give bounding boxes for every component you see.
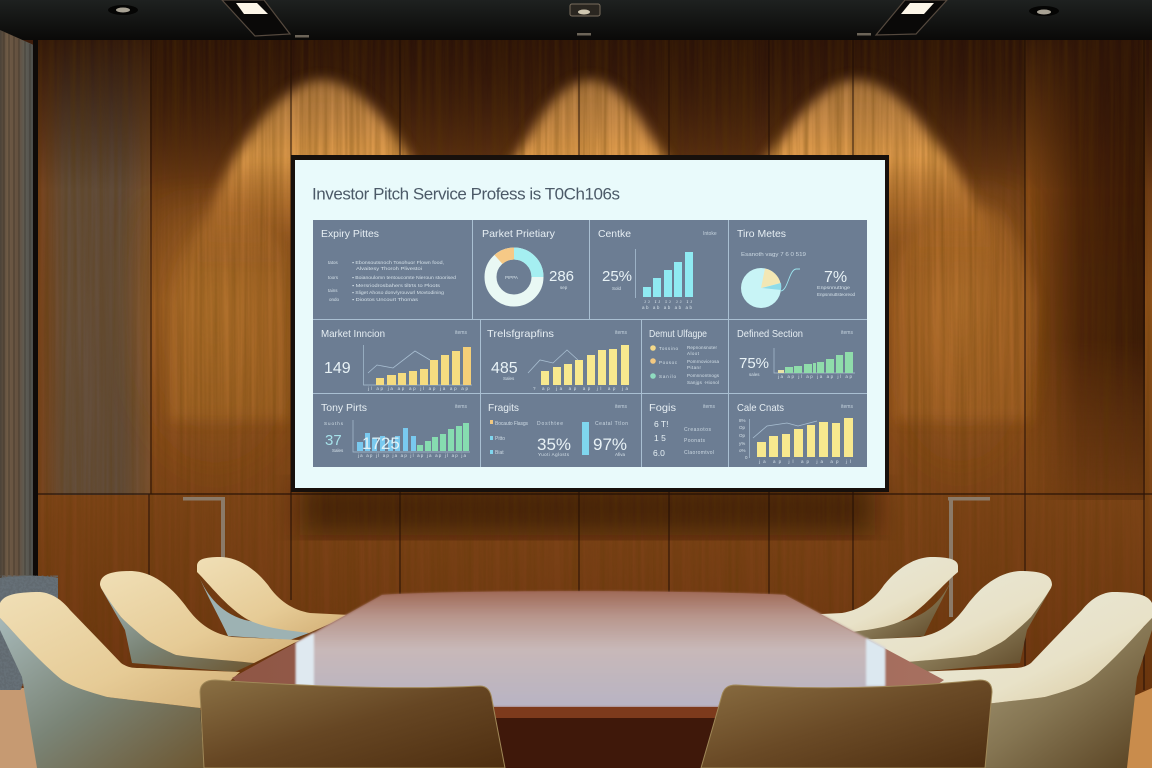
panel: cale cnats: Cale Cnats (737, 402, 784, 414)
panel: fragits: Dosthtee (537, 421, 563, 427)
panel: market inncion: Market Inncion (321, 328, 385, 340)
panel: market inncion: items (455, 330, 467, 336)
panel: trelsfgrapfins: 485 (491, 360, 518, 377)
panel: defined section: Defined Section (737, 328, 803, 340)
panel: defined section: sales (749, 372, 760, 377)
bar chart: jl ap ja ap ap jl ap ja ap ap (367, 386, 468, 391)
under table dark wood (470, 716, 730, 768)
front chair left (200, 680, 505, 768)
pie chart (741, 268, 800, 308)
panel: fogis: Creasotos (684, 427, 712, 433)
panel: demut ulfagpe: Repnonsnoter (687, 345, 718, 350)
chair right middle (852, 571, 1052, 672)
panel: expiry pittes: tatos (328, 260, 339, 265)
panel: defined section: items (841, 330, 853, 336)
panel: fogis: items (703, 404, 715, 410)
donut chart: PIPPA (505, 275, 518, 280)
panel: fragits: 35% (537, 435, 571, 454)
panel: fragits: Pitto (495, 436, 505, 442)
panel: demut ulfagpe: Demut Ulfagpe (649, 328, 707, 340)
panel: cale cnats (737, 402, 853, 464)
panel: fogis: Claoromtvol (684, 450, 714, 456)
panel: fragits: Biat (495, 450, 504, 456)
door handle right (948, 497, 990, 617)
panel: market inncion (321, 328, 472, 391)
panel: fragits: Yuoti Aglosts (538, 452, 570, 457)
panel: expiry pittes: tains (328, 288, 338, 293)
panel: cale cnats: y% (739, 441, 745, 446)
panel: parket prietiary: 286 (549, 268, 574, 285)
panel: tiro metes: Enpsnnuttnge (817, 285, 851, 290)
panel: defined section (737, 328, 855, 379)
panel: fogis (649, 402, 715, 458)
bar chart: 1725 (362, 434, 400, 453)
panel: demut ulfagpe: Aloot (687, 351, 700, 356)
panel: fogis: Fogis (649, 402, 676, 414)
chairs: left side row (0, 557, 350, 768)
panel: expiry pittes: ▪ Ebonsoutsnoch Tosohuor Flown food, (352, 260, 444, 265)
floor (0, 688, 1152, 768)
panel: tiro metes: Enpsnnuttsteoreod (817, 292, 855, 297)
panel: fragits (488, 402, 628, 457)
panel: demut ulfagpe: Pomnnontnogs (687, 373, 720, 378)
panel: trelsfgrapfins: items (615, 330, 627, 336)
panel: fogis: Poonats (684, 438, 706, 444)
panel: defined section: 75% (739, 355, 769, 372)
ceiling light right (876, 0, 947, 35)
door handle left (183, 497, 225, 559)
conference table (232, 591, 944, 718)
panel: demut ulfagpe: Tossino (659, 346, 678, 351)
panel: tony pirts: Sales (332, 448, 344, 453)
panel: demut ulfagpe: Pomrnoviorosa (687, 359, 719, 364)
panel: tiro metes: Tiro Metes (737, 228, 786, 240)
panel: tony pirts (321, 402, 470, 458)
screen title: Investor Pitch Service Profess is T0Ch106s (312, 184, 620, 204)
panel: cale cnats: Op (739, 433, 746, 438)
panel: cale cnats: 8% (739, 418, 746, 423)
ceiling light left (222, 0, 290, 36)
panel: demut ulfagpe: Pitanr (687, 365, 702, 370)
ceiling (0, 0, 1152, 40)
bar chart: ja ap jl ap ja ap jl (758, 459, 851, 464)
panel: tiro metes: 7% (824, 269, 847, 286)
panel: expiry pittes: toors (328, 275, 339, 280)
panel: cale cnats: items (841, 404, 853, 410)
bar chart: ja ap jl ap ja ap jl ap (777, 374, 852, 379)
panel: fragits: 97% (593, 435, 627, 454)
stool (0, 576, 58, 690)
chair left front (0, 592, 240, 768)
panel: fogis: 6.0 (653, 448, 665, 458)
chair left middle (100, 571, 300, 672)
panel: demut ulfagpe: Sanjgs ·Hionol (687, 380, 719, 385)
panel: tiro metes: Esanoth vagy 7 6 0 519 (741, 252, 806, 258)
panel: parket prietiary (482, 228, 574, 300)
panel: fragits: Afiva (615, 452, 626, 457)
panel: trelsfgrapfins: Trelsfgrapfins (487, 328, 554, 340)
panel: tony pirts: items (455, 404, 467, 410)
panel background (313, 220, 867, 467)
bar chart: ? ap ja ap ap jl ap ja (533, 386, 628, 391)
panel: expiry pittes: ▪ Diootos Uncourt Thomas (352, 297, 419, 302)
bar chart (636, 249, 693, 310)
panel: cale cnats: Op (739, 425, 746, 430)
bar chart (353, 420, 470, 458)
panel: expiry pittes: Expiry Pittes (321, 228, 379, 240)
downlights (108, 4, 1059, 38)
panel: cale cnats: 0 (745, 455, 748, 460)
panel: tony pirts: Suoths (324, 421, 344, 426)
panel: tony pirts: Tony Pirts (321, 402, 367, 414)
panel: expiry pittes: ▪ Mersriodrosbahers tiltrts to Ploots (352, 283, 441, 288)
panel: centke (598, 228, 717, 310)
panel: trelsfgrapfins (487, 328, 629, 391)
panel: cale cnats: o% (739, 448, 746, 453)
bar chart: ᴊᴊ ɪᴊ ɪᴊ ᴊᴊ ɪᴊ (644, 299, 692, 304)
panel: fogis: 1 5 (654, 433, 666, 443)
projection screen (291, 155, 889, 492)
panel: tony pirts: 37 (325, 432, 342, 449)
chairs: right side row (802, 557, 1152, 768)
panel: centke: Intoke (703, 231, 717, 237)
panel: expiry pittes: ▪ Boianoulomn tentoucomte Nieroun stoorised (352, 275, 457, 280)
panel: centke: Centke (598, 228, 631, 240)
panel: expiry pittes: ondo (329, 297, 340, 302)
panel: centke: 25% (602, 268, 632, 285)
panel: demut ulfagpe: Sanilo (659, 374, 676, 379)
front chair right (701, 680, 992, 768)
panel: market inncion: 149 (324, 360, 351, 377)
chair left rear (197, 557, 350, 640)
chair right rear (802, 557, 958, 640)
panel: tiro metes (737, 228, 855, 308)
panel: fragits: Ceatal Ttlon (595, 421, 628, 427)
bar chart: ja ap jl ap ja ap jl ap ja ap jl ap ja (357, 453, 466, 458)
panel: fragits: Fragits (488, 402, 519, 414)
panel: demut ulfagpe: Poosoc (659, 360, 678, 365)
panel: centke: Sold (612, 286, 622, 291)
progress bar (582, 422, 589, 455)
panel: expiry pittes: ▪ Sliget Ahoso donv/yrouvurl Movtodining (352, 290, 445, 295)
bar chart: ab ab ab ab ab (642, 305, 692, 310)
panel: fragits: items (615, 404, 627, 410)
panel: expiry pittes: Alvaitesy Thoroh Plivestoi (356, 266, 422, 271)
panel: trelsfgrapfins: Sales (503, 376, 515, 381)
bar chart (528, 345, 629, 391)
panel: demut ulfagpe (649, 328, 720, 385)
curtain left (0, 30, 38, 590)
panel: parket prietiary: sep (560, 285, 568, 290)
wall light cones (170, 80, 1035, 420)
panel: expiry pittes (321, 228, 457, 302)
dashboard panels (313, 220, 867, 467)
panel: fogis: 6 T! (654, 419, 668, 429)
bar chart (364, 345, 472, 391)
panel: parket prietiary: Parket Prietiary (482, 228, 556, 240)
panel: fragits: Bocauto Flasgs (495, 421, 528, 427)
chair right front (912, 592, 1152, 768)
